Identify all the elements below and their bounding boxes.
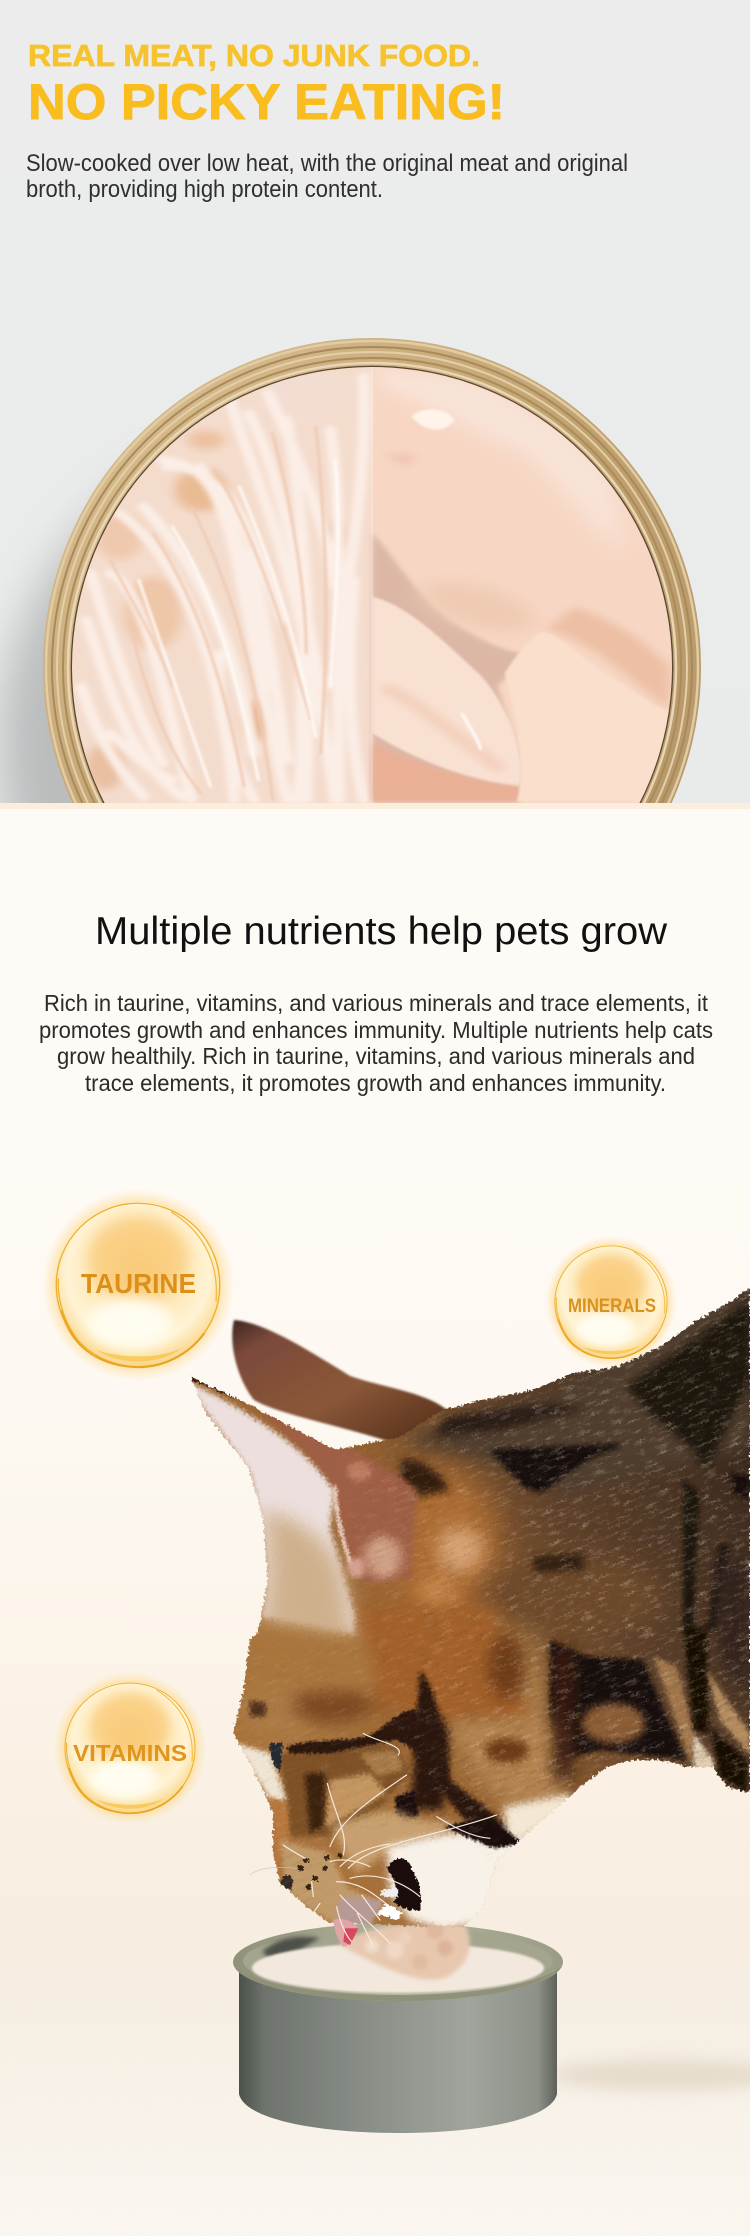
section body text [39, 990, 713, 1096]
section heading: Multiple nutrients help pets grow [95, 910, 668, 953]
section body text: grow healthily. Rich in taurine, vitamins, and various minerals and [57, 1043, 695, 1069]
whole chicken pieces [372, 367, 670, 802]
cat eating from can [190, 1288, 750, 1947]
tongue [333, 1919, 358, 1947]
cat body and head [190, 1288, 750, 1928]
gold can rim [43, 338, 701, 803]
section body text: Rich in taurine, vitamins, and various minerals and trace elements, it [44, 990, 709, 1016]
section body text: promotes growth and enhances immunity. Multiple nutrients help cats [39, 1017, 713, 1043]
nose bridge speckle [280, 1840, 383, 1937]
cheek strip and eye [237, 1743, 287, 1800]
back ear [232, 1320, 447, 1445]
section body text: trace elements, it promotes growth and enhances immunity. [85, 1070, 666, 1096]
can floor shadow [550, 2059, 750, 2091]
whiskers [250, 1733, 497, 1947]
panel: real meat hero [0, 0, 750, 803]
lower body markings [410, 1560, 750, 1810]
bubble: vitamins: VITAMINS [73, 1740, 187, 1766]
floor texture [0, 1960, 750, 2236]
can shadow [0, 496, 91, 803]
intro text [26, 150, 628, 203]
can body [239, 1972, 557, 2133]
center split line [372, 360, 373, 810]
bubble: minerals: MINERALS [568, 1296, 656, 1317]
face markings [237, 1607, 573, 1937]
peach top band [0, 803, 750, 809]
shredded chicken strands [81, 373, 364, 800]
food: shredded and whole chicken [60, 360, 682, 810]
feathered edge of big piece [545, 607, 670, 710]
fur highlights texture [204, 1288, 750, 1902]
can of food [233, 1921, 563, 2133]
meat pile [340, 1921, 470, 1980]
can interior [243, 1929, 553, 1993]
lower left piece [372, 597, 521, 787]
intro text: broth, providing high protein content. [26, 176, 383, 203]
lower right piece [505, 632, 670, 802]
headline line two: NO PICKY EATING! [28, 73, 505, 130]
headline line one: REAL MEAT, NO JUNK FOOD. [28, 39, 480, 73]
intro text: Slow-cooked over low heat, with the original meat and original [26, 150, 628, 177]
fur below ear [240, 1625, 380, 1690]
bubble: taurine: TAURINE [81, 1268, 196, 1299]
food in can [252, 1943, 544, 1993]
salmon under piece [372, 743, 519, 802]
back markings [387, 1280, 750, 1637]
open mouth [387, 1859, 421, 1910]
bubble: taurine [42, 1189, 234, 1381]
headline [30, 44, 501, 120]
bubble: minerals [545, 1236, 677, 1368]
gap between pieces [372, 533, 526, 802]
bubble: vitamins [53, 1671, 207, 1825]
ear interior [189, 1379, 416, 1646]
can rim [233, 1923, 563, 2001]
panel: nutrients section [0, 803, 750, 2236]
white muzzle and chin [387, 1832, 530, 1930]
